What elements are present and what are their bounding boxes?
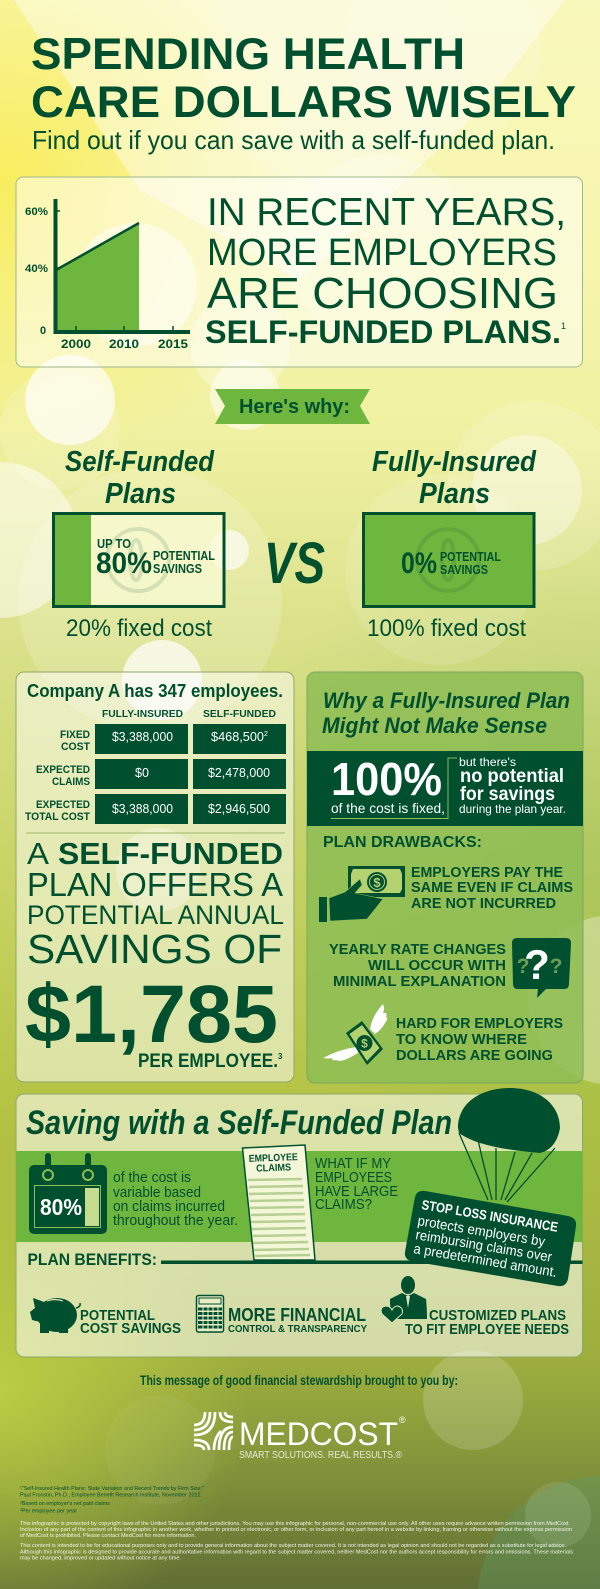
text: drawback 1: EMPLOYERS PAY THE — [411, 865, 563, 881]
panel: why fully-insured — [307, 672, 583, 1083]
title — [31, 30, 576, 127]
box: fully-insured savings: 0% — [401, 547, 437, 580]
legal text: Although this infographic is designed to provide accurate and authoritative information with regard to the subject matter covered, neither MedCost nor the authors accept responsibility for errors and omissions. These materials — [20, 1550, 573, 1556]
caption: 20% fixed cost: 20% fixed cost — [66, 615, 212, 642]
area chart: 0 — [40, 325, 46, 337]
table: $468,500 — [211, 730, 264, 744]
area chart: 2000 — [61, 339, 91, 351]
text: drawback 3 — [396, 1016, 563, 1064]
box: fully-insured savings: SAVINGS — [440, 562, 488, 577]
callout: stop loss insurance: protects employers by — [417, 1212, 546, 1249]
text: more financial control: CONTROL & TRANSPARENCY — [228, 1323, 367, 1335]
logo: medcost: SMART SOLUTIONS. REAL RESULTS.® — [239, 1450, 403, 1461]
plan benefits heading: PLAN BENEFITS: — [28, 1251, 157, 1269]
heading: Saving with a Self-Funded Plan — [26, 1104, 452, 1142]
icon: question bubble: ? — [550, 955, 562, 978]
headline: 1 — [561, 321, 566, 331]
heading: self-funded plans — [65, 446, 215, 510]
headline: SELF-FUNDED PLANS. — [205, 314, 561, 350]
text: variable cost: on claims incurred — [113, 1198, 225, 1215]
footnotes — [20, 1486, 204, 1514]
text: potential cost savings — [80, 1308, 181, 1337]
text: more financial control: MORE FINANCIAL — [228, 1305, 366, 1325]
icon: question bubble: ? — [524, 941, 550, 988]
heading: fully-insured plans: Plans — [419, 478, 490, 510]
headline — [205, 191, 566, 350]
banner: here's why: Here's why: — [239, 396, 350, 418]
box: self-funded savings: SAVINGS — [153, 561, 202, 576]
panel: recent years — [16, 177, 582, 367]
savings statement: PLAN OFFERS A — [27, 866, 283, 903]
vs: VS — [264, 531, 325, 596]
savings statement: 3 — [278, 1052, 283, 1061]
icon: employee claims paper — [242, 1145, 315, 1260]
text: more financial control — [228, 1305, 367, 1335]
title: CARE DOLLARS WISELY — [31, 78, 576, 127]
table: $3,388,000 — [112, 802, 173, 816]
heading: fully-insured plans: Fully-Insured — [372, 446, 537, 478]
icon: parachute — [458, 1088, 560, 1202]
legal text: may be changed, improved or updated without notice at any time. — [20, 1556, 181, 1562]
callout: stop loss insurance: reimbursing claims over — [415, 1226, 554, 1265]
legal text: of MedCost is prohibited. Please contact MedCost for more information. — [20, 1533, 196, 1539]
text: variable cost: of the cost is — [113, 1169, 191, 1186]
icon: person with heart — [381, 1276, 427, 1323]
area chart: 40% — [25, 263, 48, 275]
savings statement: $1,785 — [25, 969, 278, 1060]
text: drawback 1: SAME EVEN IF CLAIMS — [411, 880, 573, 896]
logo: medcost: MEDCOST — [239, 1416, 398, 1452]
sponsor line: This message of good financial stewardship brought to you by: — [140, 1373, 458, 1388]
icon: piggy bank — [30, 1298, 80, 1333]
callout: 100%: 100% — [331, 753, 442, 805]
callout: 100%: no potential — [460, 766, 564, 787]
area chart — [25, 199, 190, 351]
callout: stop loss insurance — [405, 1191, 576, 1286]
heading: Might Not Make Sense — [322, 713, 547, 738]
text: large claims question: CLAIMS? — [315, 1196, 372, 1213]
text: variable cost — [113, 1169, 238, 1229]
table: COST — [61, 741, 90, 753]
box: self-funded savings: 80% — [96, 547, 152, 580]
text: variable cost: variable based — [113, 1184, 201, 1201]
box: fully-insured savings: POTENTIAL — [440, 549, 501, 564]
legal text — [20, 1521, 573, 1562]
callout: 100% — [307, 751, 583, 826]
banner: here's why — [215, 389, 370, 424]
text: drawback 1 — [411, 865, 573, 912]
table: FIXED — [60, 729, 90, 741]
text: potential cost savings: COST SAVINGS — [80, 1321, 181, 1337]
text: drawback 2: YEARLY RATE CHANGES — [329, 942, 506, 958]
footnotes: ³Per employee per year — [20, 1508, 77, 1514]
subtitle: Find out if you can save with a self-funded plan. — [32, 125, 555, 155]
text: drawback 3: TO KNOW WHERE — [396, 1032, 527, 1048]
box: self-funded savings: UP TO — [97, 536, 131, 551]
text: large claims question — [315, 1155, 398, 1213]
table: EXPECTED — [36, 764, 90, 776]
table: $2,946,500 — [208, 802, 270, 816]
table: $0 — [135, 766, 149, 780]
icon: employee claims paper: EMPLOYEE — [249, 1152, 298, 1165]
text: large claims question: HAVE LARGE — [315, 1183, 398, 1200]
icon: employee claims paper: CLAIMS — [256, 1162, 292, 1175]
icon: calendar: 80% — [40, 1194, 82, 1220]
panel: saving with self-funded plan — [16, 1088, 582, 1357]
text: drawback 3: HARD FOR EMPLOYERS — [396, 1016, 563, 1032]
table: TOTAL COST — [25, 811, 90, 823]
text: potential cost savings: POTENTIAL — [80, 1308, 155, 1324]
headline: ARE CHOOSING — [207, 269, 558, 318]
text: drawback 1: ARE NOT INCURRED — [411, 896, 556, 912]
table: $3,388,000 — [112, 730, 173, 744]
box: self-funded savings — [54, 514, 224, 606]
table: SELF-FUNDED — [203, 708, 276, 720]
callout: stop loss insurance: a predetermined amount. — [413, 1240, 558, 1280]
table: $2,478,000 — [208, 766, 270, 780]
footnotes: Paul Fronstin, Ph.D., Employee Benefit Research Institute, November 2012. — [20, 1492, 202, 1498]
icon: question bubble: ? — [517, 955, 529, 978]
callout: 100%: but there's — [459, 755, 516, 769]
callout: 100%: during the plan year. — [459, 802, 566, 816]
headline: IN RECENT YEARS, — [207, 191, 566, 234]
icon: calendar — [29, 1156, 107, 1234]
box: fully-insured savings — [364, 514, 534, 606]
callout: stop loss insurance: STOP LOSS INSURANCE — [421, 1197, 559, 1235]
logo: medcost — [194, 1412, 406, 1461]
headline: MORE EMPLOYERS — [207, 232, 557, 274]
table: CLAIMS — [52, 776, 90, 788]
heading: Why a Fully-Insured Plan — [323, 688, 570, 713]
footnotes: ¹"Self-Insured Health Plans: State Variation and Recent Trends by Firm Size," — [20, 1486, 204, 1492]
legal text: This content is intended to be for educational purposes only and to provide general information about the subject matter covered. It is not intended as legal opinion and should not be regarded as a substitute for legal advice. — [20, 1543, 566, 1549]
panel: company a — [16, 672, 294, 1082]
icon: flying money — [323, 1004, 387, 1065]
title: SPENDING HEALTH — [31, 30, 465, 79]
heading: fully-insured plans — [372, 446, 537, 510]
callout: 100%: of the cost is fixed, — [331, 800, 445, 816]
icon: flying money: $ — [361, 1036, 368, 1050]
text: large claims question: WHAT IF MY — [315, 1155, 391, 1172]
text: drawback 2 — [329, 942, 506, 990]
heading: plan drawbacks: PLAN DRAWBACKS: — [323, 834, 482, 851]
callout: 100%: for savings — [460, 784, 555, 805]
text: customized plans: TO FIT EMPLOYEE NEEDS — [405, 1321, 569, 1338]
caption: 100% fixed cost: 100% fixed cost — [367, 615, 526, 642]
savings statement: PER EMPLOYEE. — [138, 1051, 278, 1072]
savings statement: POTENTIAL ANNUAL — [27, 900, 284, 930]
icon: question bubble — [512, 938, 571, 998]
area chart: 2015 — [158, 339, 189, 351]
icon: hand with money — [319, 866, 405, 922]
legal text: This infographic is protected by copyright laws of the United States and other jurisdictions. You may use this infographic for personal, non-commercial use only. All other uses require advance written permission from MedCost. — [20, 1521, 570, 1527]
text: large claims question: EMPLOYEES — [315, 1169, 392, 1186]
table: EXPECTED — [36, 799, 90, 811]
plan benefits heading — [28, 1251, 582, 1269]
savings statement: SAVINGS OF — [27, 926, 282, 972]
text: drawback 2: MINIMAL EXPLANATION — [333, 974, 506, 990]
area chart: 60% — [25, 206, 48, 218]
heading — [322, 688, 570, 738]
savings statement: A — [27, 836, 49, 871]
table: FULLY-INSURED — [102, 708, 183, 720]
logo: medcost: ® — [399, 1415, 406, 1425]
text: drawback 3: DOLLARS ARE GOING — [396, 1048, 553, 1064]
table — [25, 681, 286, 824]
savings statement — [25, 836, 284, 1072]
text: customized plans: CUSTOMIZED PLANS — [429, 1307, 566, 1324]
area chart: 2010 — [109, 339, 139, 351]
box: self-funded savings: POTENTIAL — [153, 548, 215, 563]
text: drawback 2: WILL OCCUR WITH — [368, 958, 506, 974]
heading: self-funded plans: Self-Funded — [65, 446, 215, 478]
table: 2 — [264, 731, 268, 738]
footnotes: ²Based on employer's net paid claims — [20, 1501, 110, 1507]
savings statement: SELF-FUNDED — [58, 836, 283, 871]
text: variable cost: throughout the year. — [113, 1212, 238, 1229]
icon: hand with money: $ — [373, 875, 381, 890]
text: customized plans — [405, 1307, 569, 1338]
table: Company A has 347 employees. — [27, 681, 283, 701]
icon: calculator — [196, 1296, 224, 1332]
heading: self-funded plans: Plans — [105, 478, 176, 510]
legal text: Inclusion of any part of the content of this infographic in another work, whether in printed or electronic, or other form, or inclusion of any part hereof in a website by linking, framing or otherwise without the express permission — [20, 1527, 572, 1533]
